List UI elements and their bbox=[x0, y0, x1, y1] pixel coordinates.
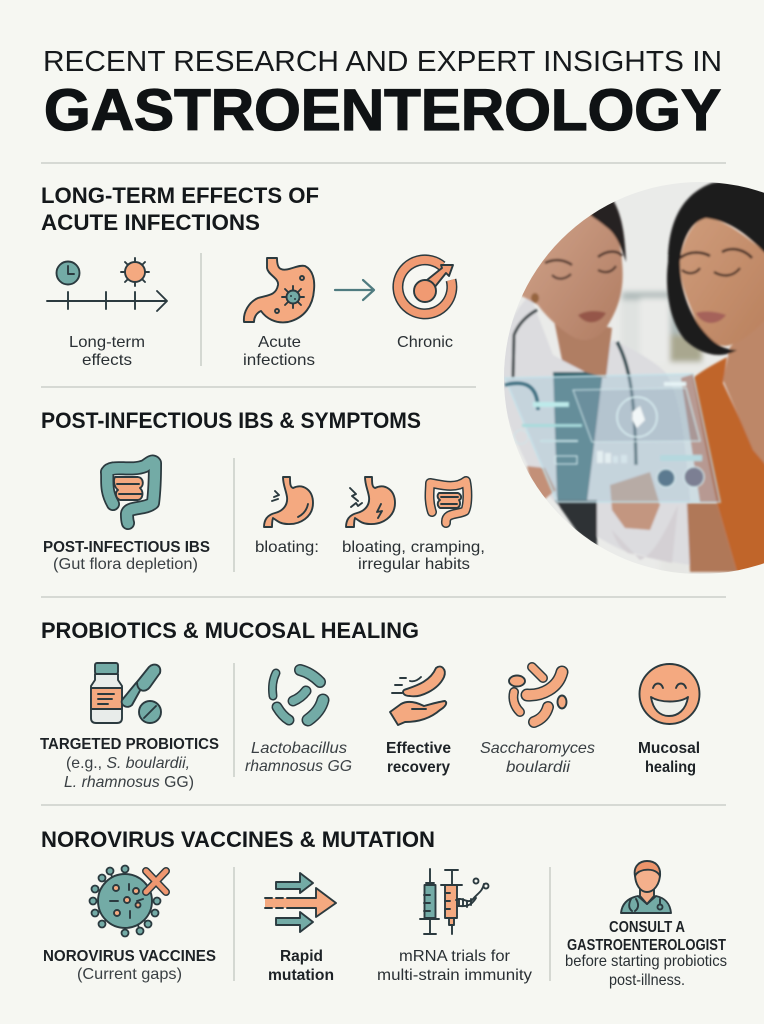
label: mRNA trials: mRNA trials for bbox=[399, 948, 511, 965]
icon: colon with small intestine bbox=[107, 462, 155, 523]
label: acute infections bbox=[243, 334, 315, 369]
label: targeted probiotics: L. rhamnosus GG) bbox=[64, 774, 194, 791]
label: rapid mutation bbox=[268, 948, 334, 984]
label: saccharomyces boulardii: boulardii bbox=[506, 759, 570, 776]
heading: POST-INFECTIOUS IBS & SYMPTOMS bbox=[41, 408, 421, 433]
icon: smiling face bbox=[640, 664, 700, 724]
callout: consult a gastroenterologist bbox=[565, 919, 727, 989]
section 1: long-term effects of acute infections bbox=[41, 183, 453, 369]
section 3: probiotics and mucosal healing bbox=[40, 618, 700, 791]
label: targeted probiotics bbox=[40, 736, 219, 791]
label: mucosal healing: healing bbox=[645, 759, 696, 776]
icon: cramping stomach bbox=[346, 477, 395, 527]
label: saccharomyces boulardii bbox=[480, 740, 595, 776]
label: long-term effects: Long-term bbox=[69, 334, 145, 351]
label: rapid mutation: mutation bbox=[268, 967, 334, 984]
label: mucosal healing: Mucosal bbox=[638, 740, 700, 757]
title bbox=[43, 46, 722, 143]
label: acute infections: Acute bbox=[258, 334, 301, 351]
callout: consult a gastroenterologist: CONSULT A bbox=[609, 919, 685, 936]
label: bloating, cramping, irregular habits: bloating, cramping, bbox=[342, 539, 485, 556]
heading: PROBIOTICS & MUCOSAL HEALING bbox=[41, 618, 419, 643]
label: norovirus vaccines bbox=[43, 948, 216, 983]
icon: rapid mutation arrows bbox=[265, 873, 336, 932]
label: norovirus vaccines: (Current gaps) bbox=[77, 966, 182, 983]
section 4: norovirus vaccines and mutation bbox=[41, 827, 727, 989]
label: acute infections: infections bbox=[243, 352, 315, 369]
label: targeted probiotics: TARGETED PROBIOTICS bbox=[40, 736, 219, 753]
title: GASTROENTEROLOGY bbox=[44, 78, 721, 143]
label: long-term effects bbox=[69, 334, 145, 369]
label: chronic: Chronic bbox=[397, 334, 453, 351]
heading: NOROVIRUS VACCINES & MUTATION bbox=[41, 827, 435, 852]
label: mRNA trials bbox=[377, 948, 532, 984]
label: bloating, cramping, irregular habits bbox=[342, 539, 485, 573]
icon: saccharomyces cells bbox=[509, 667, 566, 722]
label: effective recovery bbox=[386, 740, 451, 776]
icon: chronic gauge bbox=[398, 260, 453, 314]
icon: small colon bbox=[430, 481, 467, 523]
section 2: post-infectious IBS and symptoms bbox=[41, 408, 485, 573]
arrow: acute to chronic bbox=[335, 280, 374, 300]
icon: stomach with infection bbox=[244, 258, 314, 322]
label: bloating, cramping, irregular habits: irregular habits bbox=[358, 556, 470, 573]
label: post-infectious IBS bbox=[43, 539, 210, 573]
icon: gastroenterologist bbox=[621, 861, 671, 913]
label: post-infectious IBS: POST-INFECTIOUS IBS bbox=[43, 539, 210, 556]
label: effective recovery: recovery bbox=[387, 759, 450, 776]
heading bbox=[41, 183, 319, 235]
icon: bloating stomach bbox=[264, 477, 313, 527]
photo: doctor and patient viewing a holographic panel bbox=[500, 180, 764, 575]
icon: probiotic bottle and capsules bbox=[91, 663, 161, 723]
callout: consult a gastroenterologist: post-illness. bbox=[609, 972, 685, 989]
label: targeted probiotics: (e.g., S. boulardii, bbox=[66, 755, 190, 772]
label: lactobacillus rhamnosus GG bbox=[245, 740, 352, 775]
title: RECENT RESEARCH AND EXPERT INSIGHTS IN bbox=[43, 46, 722, 78]
callout: consult a gastroenterologist: GASTROENTEROLOGIST bbox=[567, 937, 726, 954]
label: mRNA trials: multi-strain immunity bbox=[377, 967, 532, 984]
label: norovirus vaccines: NOROVIRUS VACCINES bbox=[43, 948, 216, 965]
callout: consult a gastroenterologist: before starting probiotics bbox=[565, 953, 727, 970]
icon: norovirus with cross bbox=[90, 866, 166, 936]
heading: ACUTE INFECTIONS bbox=[41, 210, 260, 235]
label: post-infectious IBS: (Gut flora depletion) bbox=[53, 556, 198, 573]
label: mucosal healing bbox=[638, 740, 700, 776]
heading: LONG-TERM EFFECTS OF bbox=[41, 183, 319, 208]
label: rapid mutation: Rapid bbox=[280, 948, 323, 965]
icon: lactobacillus rods bbox=[272, 670, 323, 720]
label: lactobacillus rhamnosus GG: rhamnosus GG bbox=[245, 758, 352, 775]
icon: syringes and DNA bbox=[420, 869, 488, 934]
label: effective recovery: Effective bbox=[386, 740, 451, 757]
icon: timeline bbox=[47, 258, 167, 311]
label: saccharomyces boulardii: Saccharomyces bbox=[480, 740, 595, 757]
icon: effective recovery hand and bean bbox=[390, 667, 446, 725]
label: bloating: bloating: bbox=[255, 539, 319, 556]
label: long-term effects: effects bbox=[82, 352, 132, 369]
holographic panel bbox=[505, 374, 720, 502]
label: lactobacillus rhamnosus GG: Lactobacillus bbox=[251, 740, 347, 757]
